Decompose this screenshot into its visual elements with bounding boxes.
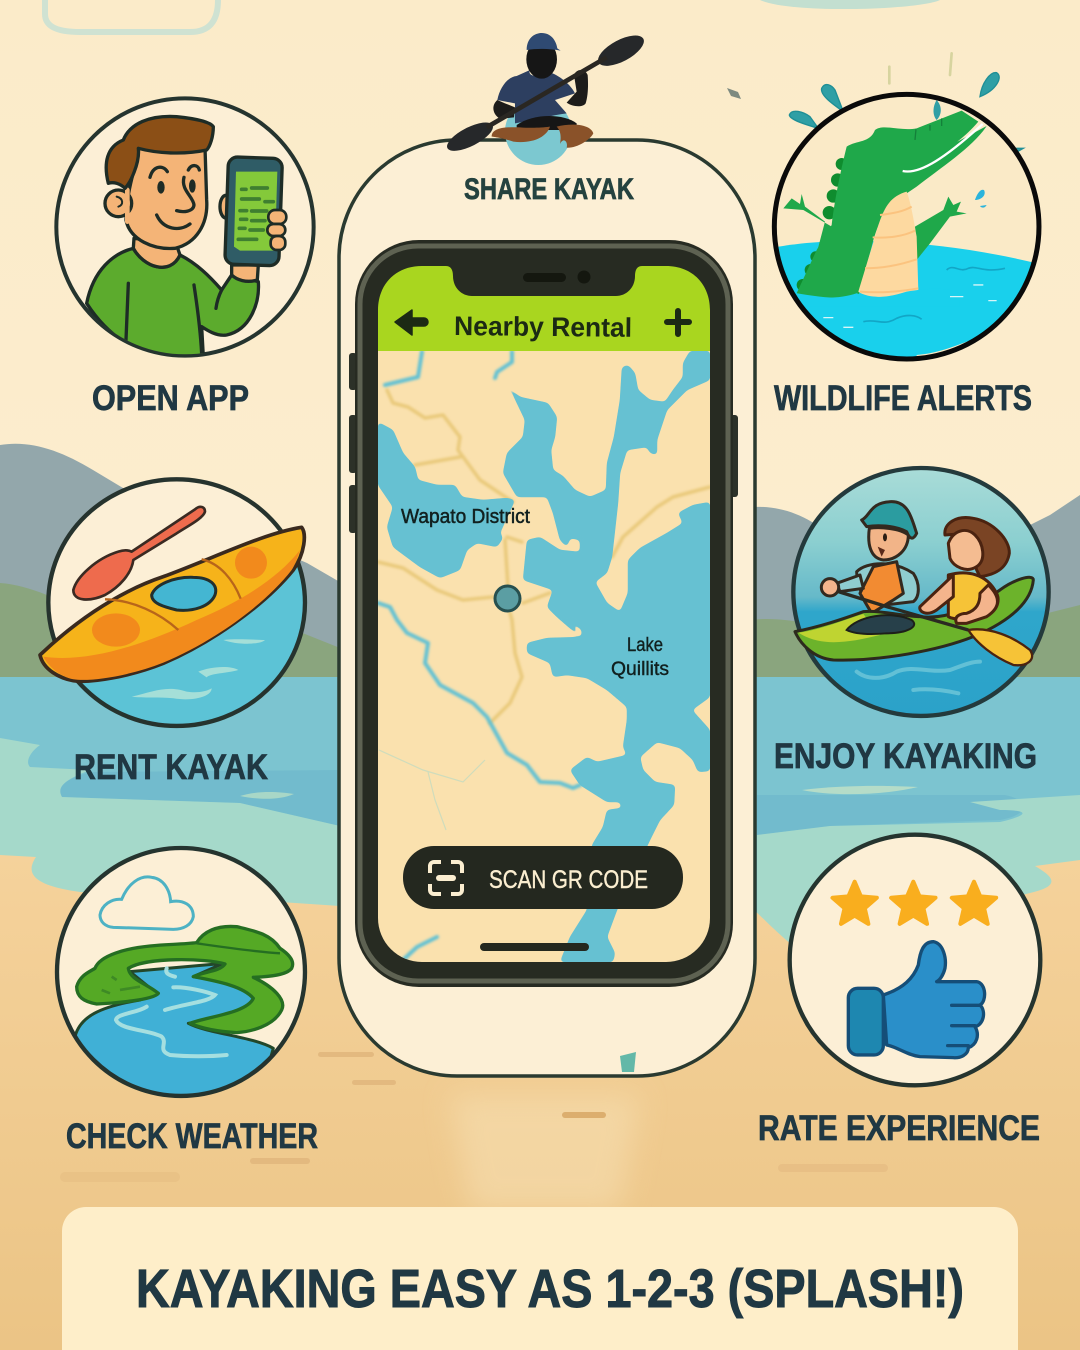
mountains left xyxy=(0,444,345,680)
icon: back arrow xyxy=(395,310,428,335)
kayak xyxy=(795,577,1033,660)
icon: open app xyxy=(56,98,314,359)
icon: plus xyxy=(667,311,689,334)
cloud xyxy=(100,877,193,929)
bottom stain xyxy=(620,1052,636,1072)
title: KAYAKING EASY AS 1-2-3 (SPLASH!) xyxy=(136,1259,964,1319)
home bar xyxy=(480,943,589,951)
phone side buttons xyxy=(349,353,738,533)
woman xyxy=(920,518,1009,623)
splash drops xyxy=(789,73,1023,163)
header title: Nearby Rental xyxy=(454,311,632,343)
map water xyxy=(378,351,710,962)
stars xyxy=(832,882,996,924)
map rivers xyxy=(378,352,580,960)
label: enjoy kayaking: ENJOY KAYAKING xyxy=(774,737,1037,776)
panel: title banner xyxy=(62,1207,1018,1350)
paddle xyxy=(968,629,1032,665)
phone xyxy=(349,240,738,987)
sand xyxy=(0,855,1080,1350)
label: share kayak: SHARE KAYAK xyxy=(464,173,634,206)
app header xyxy=(378,266,710,351)
icon: scan frame xyxy=(430,862,462,894)
icon: enjoy kayaking xyxy=(793,468,1049,716)
panel: phone card xyxy=(339,140,755,1076)
scan button: SCAN GR CODE xyxy=(489,866,648,894)
thumbs up xyxy=(883,942,985,1058)
map label: lake quillits: Quillits xyxy=(611,659,669,680)
speaker and camera xyxy=(523,270,590,284)
map roads xyxy=(378,390,710,723)
icon: wildlife alert crocodile xyxy=(770,53,1039,373)
river highlights xyxy=(116,968,227,1056)
sea xyxy=(0,677,1080,967)
label: wildlife alerts: WILDLIFE ALERTS xyxy=(774,379,1032,418)
label: rent kayak: RENT KAYAK xyxy=(74,748,268,787)
label: open app: OPEN APP xyxy=(92,379,249,418)
icon: rate experience xyxy=(790,835,1040,1085)
mountains right xyxy=(750,495,1080,680)
label: check weather: CHECK WEATHER xyxy=(66,1117,318,1156)
top clouds xyxy=(45,0,218,32)
map screen xyxy=(378,351,710,962)
hull xyxy=(40,527,304,681)
icon: kayaker silhouette xyxy=(443,29,648,165)
map pin xyxy=(495,586,520,611)
paddle xyxy=(73,507,205,599)
map label: lake quillits: Lake xyxy=(627,635,663,656)
man xyxy=(821,502,918,613)
icon: rent kayak xyxy=(30,479,310,737)
scan button xyxy=(403,846,683,909)
label: rate experience: RATE EXPERIENCE xyxy=(758,1109,1040,1148)
map label: wapato district: Wapato District xyxy=(401,506,530,528)
icon: check weather xyxy=(57,848,305,1107)
